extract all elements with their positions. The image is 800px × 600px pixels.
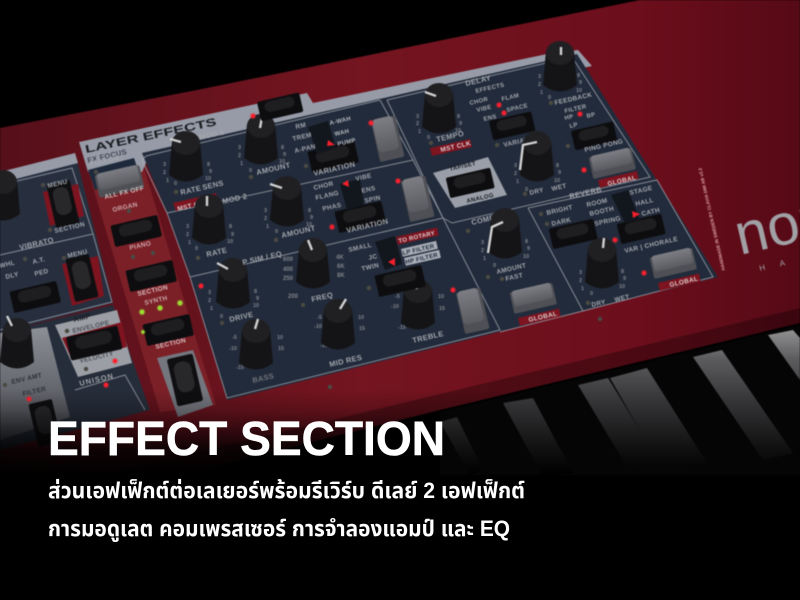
control labels: VARIATION [312,160,356,178]
key bed [440,325,800,475]
side imprint: HANDMADE IN SWEDEN BY CLAVIA DMI AB v2.2 [697,167,726,271]
control labels: TWIN [361,262,380,273]
tag: mst clk [430,139,472,156]
scale: comp: 8 [525,239,528,245]
control labels: LP [569,122,579,130]
control labels: SMALL [348,242,373,254]
panel: env amount [0,327,70,440]
heading: layer effects: LAYER EFFECTS [84,116,218,156]
scale: mod2 amount: 1 [266,224,269,230]
control labels: ENVELOPE [72,320,111,335]
scale: delay dry wet: 3 [514,163,517,169]
scale: feedback: 1 [540,90,543,96]
tag: global reverb [658,274,701,291]
control labels: VIBRATO [18,235,55,252]
scale: mod1 rate: 3 [163,162,166,168]
button: ping pong on [588,147,636,179]
scale: comp: 9 [527,246,530,252]
control labels: PED [34,268,49,278]
scale: tempo [416,114,462,141]
knob: tempo [422,83,456,134]
scale: comp: 10 [523,254,529,260]
control labels: VELOCITY [79,350,115,365]
scale: reverb dry wet: 2 [579,278,582,284]
control labels: MOD 2 [221,191,248,206]
knob: mod1 rate [169,131,203,182]
scale: mod2 amount: 2 [264,216,267,222]
panel: left lower section [0,305,150,450]
tag: global comp [518,309,561,326]
red selector arrows [327,140,640,266]
scale: bass: -15 [236,365,244,371]
knob: bass [239,319,273,370]
control labels: PUMP [337,138,357,148]
scale: comp: 0 [493,263,496,269]
scale: tempo: 8 [457,114,460,120]
scale: bass: -10 [229,346,237,352]
button: envelope [66,325,123,361]
knob: comp amount [488,208,522,258]
scale: mod2 rate: 3 [186,224,189,230]
scale: delay dry wet: 2 [514,171,517,177]
scale: feedback: 0 [548,95,551,101]
scale: treble: 10 [438,294,444,300]
scale: reverb dry wet: 8 [621,269,624,275]
button: menu lower [65,254,99,302]
control labels [0,73,679,398]
button: reverb bright dark [549,219,598,249]
control labels: FLAM [501,93,520,103]
scale: bass: 15 [278,346,284,352]
tag: lp filter [401,241,438,257]
control labels: VIBE [476,105,492,114]
control labels: CHOR [469,97,489,107]
control labels: SYNTH [144,295,168,307]
scale: freq: 8K [337,273,345,279]
tag text: to rotary: TO ROTARY [398,231,436,245]
scale: mod1 rate: 8 [207,162,210,168]
control labels: SECTION [155,337,187,351]
scale: feedback [538,73,582,101]
knob: mod1 amount [244,114,278,164]
scale: mod2 rate: 8 [229,224,232,230]
control labels: AMOUNT [255,160,291,177]
tag text: hp filter: HP FILTER [405,253,439,266]
scale: freq: 4K [336,255,344,261]
scale: freq: 6K [337,264,345,270]
control labels: VARIATION [345,217,389,235]
control labels: TREM [292,132,313,143]
button: top on [257,92,303,121]
scale: reverb dry wet: 9 [623,276,626,282]
scale: bass [229,335,284,371]
control labels: RM [295,122,307,131]
red button surrounds [43,184,127,360]
button: piano [125,260,177,292]
control labels: ALL FX OFF [104,185,145,201]
control labels: ENV AMT [11,372,43,386]
control labels: A-WAH [329,116,352,127]
keyboard keys [440,325,800,477]
control labels: WAH [334,129,350,138]
scale: mod1 rate: 9 [209,169,212,175]
tag text: global delay: GLOBAL [607,175,637,188]
control labels: REVERB [568,185,603,201]
control labels: BRIGHT [546,204,573,217]
control labels: FILTER [22,386,47,398]
knob: treble [401,279,435,330]
scale: drive: 1 [210,306,213,312]
button: tap [446,168,495,198]
control labels: SPACE [506,103,529,114]
panel: amp [55,310,132,377]
description line 2: การมอดูเลต คอมเพรสเซอร์ การจำลองแอมป์ และ EQ [48,516,510,542]
highlighted labels [396,139,701,326]
knob: mid [321,299,355,350]
knob pointers [7,47,604,329]
scale: mod1 amount [238,145,286,174]
green LEDs [140,301,182,334]
scale: treble: -10 [391,304,399,310]
control labels: MID RES [328,353,363,369]
scale: delay dry wet [514,163,561,193]
scale: delay dry wet: 1 [516,179,519,185]
control labels: AMOUNT [496,262,527,276]
button: comp on [509,282,557,314]
buttons [9,92,697,447]
knob: freq [296,238,330,288]
scale: mod1 rate: 1 [166,178,169,184]
scale: mid: 15 [359,326,365,332]
control labels: VAR | CHORALE [624,236,679,255]
tag text: lp filter: LP FILTER [402,244,435,257]
control labels: EFFECTS [475,82,505,95]
button: reverb on [649,247,697,279]
red LEDs [27,103,646,401]
control labels: DRIVE [228,310,254,324]
control labels: TEMPO [435,129,465,144]
scale: mod1 rate: 0 [174,181,177,187]
scale: treble: -15 [398,325,406,331]
scale: feedback: 9 [579,80,582,86]
knobs [0,41,619,370]
control labels: SPRING [594,215,621,228]
scale: reverb dry wet: 1 [581,286,584,292]
control labels: SECTION [137,284,169,298]
control labels: STAGE [629,185,654,197]
control labels: SENS [201,178,225,192]
scale: feedback: 8 [577,73,580,79]
scale: tempo: 10 [455,128,461,134]
tag: global delay [598,171,639,188]
tag text: global comp: GLOBAL [528,311,558,324]
button: shift [167,353,203,407]
scale: freq [283,255,345,300]
scale: drive: 0 [220,314,223,320]
scale: tempo: 0 [427,135,430,141]
labels behind knobs: MOD 1 [198,127,225,142]
panel: left header band [0,153,78,183]
control labels: DARK [551,217,572,228]
control labels: ROOM [586,197,608,209]
scale: mid: -10 [314,324,322,330]
front lip shadow [0,308,800,520]
knob: env amount [0,318,34,368]
control labels: FEEDBACK [554,91,593,107]
scale: mod1 rate [163,162,212,187]
knob: left [0,170,20,220]
knob: feedback [543,41,577,92]
scale: mid: -15 [320,343,328,349]
scale: drive [208,289,259,320]
scale: mod2 amount: 8 [308,208,311,214]
scale: mod1 amount: 9 [283,152,286,158]
control labels: P SIM / EQ [241,249,283,267]
button: menu upper [46,180,80,228]
scale: comp: 2 [481,248,484,254]
knob: mod2 rate [192,194,226,244]
scale: mod2 amount: 9 [310,215,313,221]
labels behind knobs: VARIATION [503,134,541,149]
control labels: HP [564,114,574,122]
scale: tempo: 3 [416,114,419,120]
label: tap set: TAP/SET [449,161,477,173]
button: filter [571,121,617,150]
labels behind knobs: COMP [470,213,496,227]
scale: mod2 amount: 3 [264,208,267,214]
scale: tempo: 2 [416,121,419,127]
panel: tap set [433,157,507,208]
panel: fx focus top [88,158,140,190]
tag text: global reverb: GLOBAL [669,276,699,289]
nord logo: HA [758,255,800,273]
scale: reverb dry wet: 3 [579,270,582,276]
scale: feedback: 3 [538,74,541,80]
knob: drive [216,258,250,308]
scale: tempo: 9 [459,121,462,127]
scale: bass: -5 [232,335,237,341]
scale: drive: 8 [254,289,257,295]
control labels: BOOTH [589,206,615,218]
control labels: PING PONG [584,138,624,154]
scale: freq: 250 [283,276,294,282]
control labels: CHOR [313,181,334,192]
scale: mod1 amount: 1 [240,161,243,167]
control labels: DRY [529,187,545,197]
scale: bass: 10 [277,335,283,341]
tag: hp filter [404,250,441,266]
scale: delay dry wet: 0 [525,187,528,193]
button: synth [142,314,194,346]
scale: comp: 3 [481,240,484,246]
scale: mod2 rate: 10 [227,239,233,245]
panel: section selector strip [88,155,216,412]
scale: mod1 rate: 2 [163,170,166,176]
button: effects variation [489,111,535,140]
scale: mod2 amount: 0 [275,229,278,235]
scale: delay dry wet: 8 [556,163,559,169]
knob scales [163,73,626,371]
title: EFFECT SECTION [48,413,445,466]
control labels: AMOUNT [280,223,316,240]
scale: mod2 amount [264,208,313,235]
control labels: VIBE [355,172,373,183]
scale: reverb dry wet [579,269,626,297]
button: reverb variation [617,214,666,244]
control labels: SECTION [54,221,86,235]
control labels: WET [551,183,567,193]
control labels: DELAY [464,73,492,88]
tag: to rotary [396,228,439,245]
scale: drive: 2 [208,298,211,304]
control labels: FILTER [564,104,588,115]
control labels: TREBLE [411,329,444,345]
button: all fx off [94,164,144,198]
scale: mid [314,315,365,349]
panel: shift [157,350,213,417]
button: amp sim variation [374,265,426,297]
control labels: ORGAN [112,201,138,214]
label: analog: ANALOG [466,193,495,205]
scale: mod2 rate: 1 [188,240,191,246]
control labels: WET [614,294,630,304]
scale: mod1 rate: 10 [205,176,211,182]
selector matrices [308,121,640,270]
scale: reverb dry wet: 0 [590,291,593,297]
scale: comp [481,239,530,269]
off LEDs [3,101,602,389]
control labels: MENU [67,249,88,260]
button: organ [110,215,162,247]
scale: drive: 10 [253,303,259,309]
scale: treble: -5 [395,294,400,300]
control labels: RATE [179,183,202,197]
knob: mod2 amount [270,176,304,226]
scale: mid: 10 [358,315,364,321]
scale: feedback: 10 [576,88,582,94]
scale: mod2 rate: 0 [195,246,198,252]
scale: reverb dry wet: 10 [619,284,625,290]
scale: freq: 200 [288,294,299,300]
scale: freq: 400 [283,267,294,273]
scale: mod1 amount: 3 [238,145,241,151]
button: mod1 on [371,115,405,162]
scale: treble [391,294,445,331]
control labels: FAST [505,272,524,283]
scale: delay dry wet: 9 [558,170,561,176]
scale: mod1 amount: 10 [279,159,285,165]
control labels: SPIN [364,194,381,205]
scale: treble: 15 [439,306,445,312]
control labels: ENS [361,185,377,195]
scale: drive: 9 [256,296,259,302]
label: fx focus: FX FOCUS [86,147,128,165]
scale: mod1 amount: 2 [238,153,241,159]
button: mod2 on [401,175,435,222]
scale: drive: 3 [208,290,211,296]
button: mod1 variation [307,141,359,173]
control labels: PHAS [322,202,343,213]
button: amp on [456,287,490,334]
panel: layer effects header band [79,50,592,172]
scale: mod2 amount: 10 [306,222,312,228]
description line 1: ส่วนเอฟเฟ็กต์ต่อเลเยอร์พร้อมรีเวิร์บ ดีเลย์ 2 เอฟเฟ็กต์ [48,478,525,503]
knob: delay dry wet [520,131,554,182]
control labels: FOLLOW [90,154,121,168]
tag text: mst clk: MST CLK [440,140,472,154]
scale: mod1 amount: 0 [249,168,252,174]
control labels: FREQ [310,290,334,304]
scale: mod2 rate: 2 [186,232,189,238]
scale: mid: -5 [317,315,322,321]
control labels: BASS [251,371,275,385]
control labels: FLANG [315,190,340,202]
control labels: PIANO [129,240,152,252]
control labels: JC [368,253,378,262]
scale: tempo: 1 [418,129,421,135]
control labels: MENU [47,179,68,190]
panel: left synth section [0,160,113,333]
button: vibrato on [9,281,61,313]
labels behind knobs: MST CLK [177,199,209,213]
knob: reverb dry wet [585,238,619,288]
control labels: BP [586,112,596,120]
control labels: AMP [72,311,92,324]
scale: feedback: 2 [538,82,541,88]
control labels: UNISON [78,371,115,388]
bottom fade overlay [0,390,800,475]
control labels: A-PAN [294,143,317,155]
control labels: DLY [5,271,20,281]
button: mod2 variation [334,201,386,233]
section dividers [0,57,713,410]
control labels: A.T. [32,256,46,266]
scale: mod1 amount: 8 [281,145,284,151]
scale: delay dry wet: 10 [554,178,560,184]
tag: mod1 mst clk [173,193,218,211]
button: filter on [28,399,62,447]
control labels: DRY [591,299,607,309]
scale: freq: 600 [283,257,294,263]
scale: mod2 rate: 9 [231,232,234,238]
scale: mod2 rate [186,224,234,252]
control labels: RATE [205,245,228,259]
scale: comp: 1 [483,256,486,262]
labels behind knobs [177,127,541,227]
control labels: CATH [641,207,661,218]
control labels: ENS [483,114,497,123]
control labels: HALL [635,197,655,208]
panel: effects main [142,54,718,400]
